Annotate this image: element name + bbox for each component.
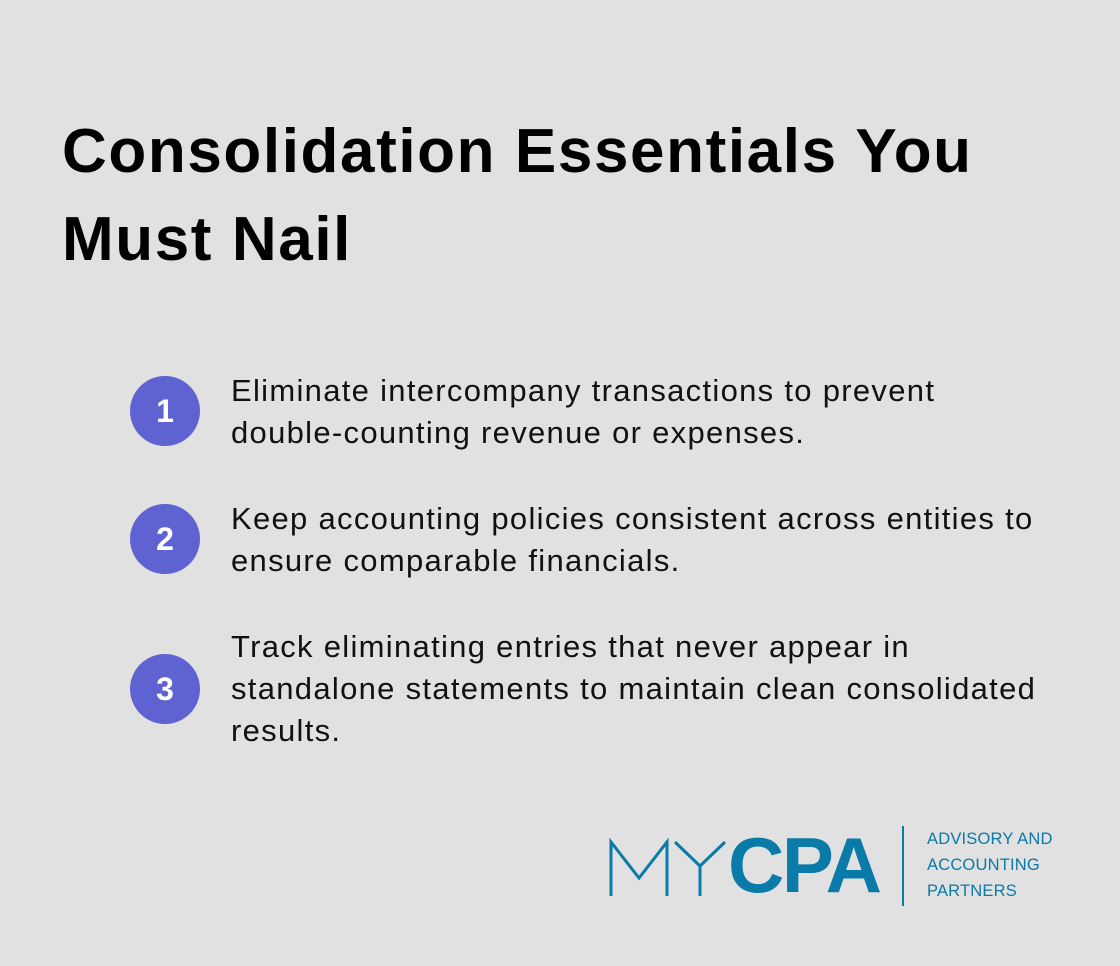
tagline [927, 830, 1053, 900]
text 2: Keep accounting policies consistent across entities to [231, 501, 1034, 536]
badge 3: 3 [156, 671, 174, 707]
badge 2 [130, 504, 200, 574]
item 3 [130, 629, 1036, 748]
tagline: ADVISORY AND [927, 830, 1053, 848]
text 3: results. [231, 713, 341, 748]
text 3 [231, 629, 1036, 748]
item 2 [130, 501, 1034, 578]
title [62, 117, 973, 274]
tagline: ACCOUNTING [927, 856, 1040, 874]
text 1: double-counting revenue or expenses. [231, 415, 805, 450]
text 1 [231, 373, 935, 450]
logo MY thin letters [610, 838, 726, 896]
logo [610, 821, 1053, 909]
text 2: ensure comparable financials. [231, 543, 681, 578]
title: Consolidation Essentials You [62, 117, 973, 186]
badge 3 [130, 654, 200, 724]
item 1 [130, 373, 935, 450]
text 3: Track eliminating entries that never appear in [231, 629, 910, 664]
tagline: PARTNERS [927, 882, 1017, 900]
logo CPA bold: CPA [728, 821, 879, 909]
title: Must Nail [62, 205, 352, 274]
badge 2: 2 [156, 521, 174, 557]
text 2 [231, 501, 1034, 578]
badge 1: 1 [156, 393, 174, 429]
badge 1 [130, 376, 200, 446]
text 3: standalone statements to maintain clean consolidated [231, 671, 1036, 706]
text 1: Eliminate intercompany transactions to prevent [231, 373, 935, 408]
divider [902, 826, 904, 906]
